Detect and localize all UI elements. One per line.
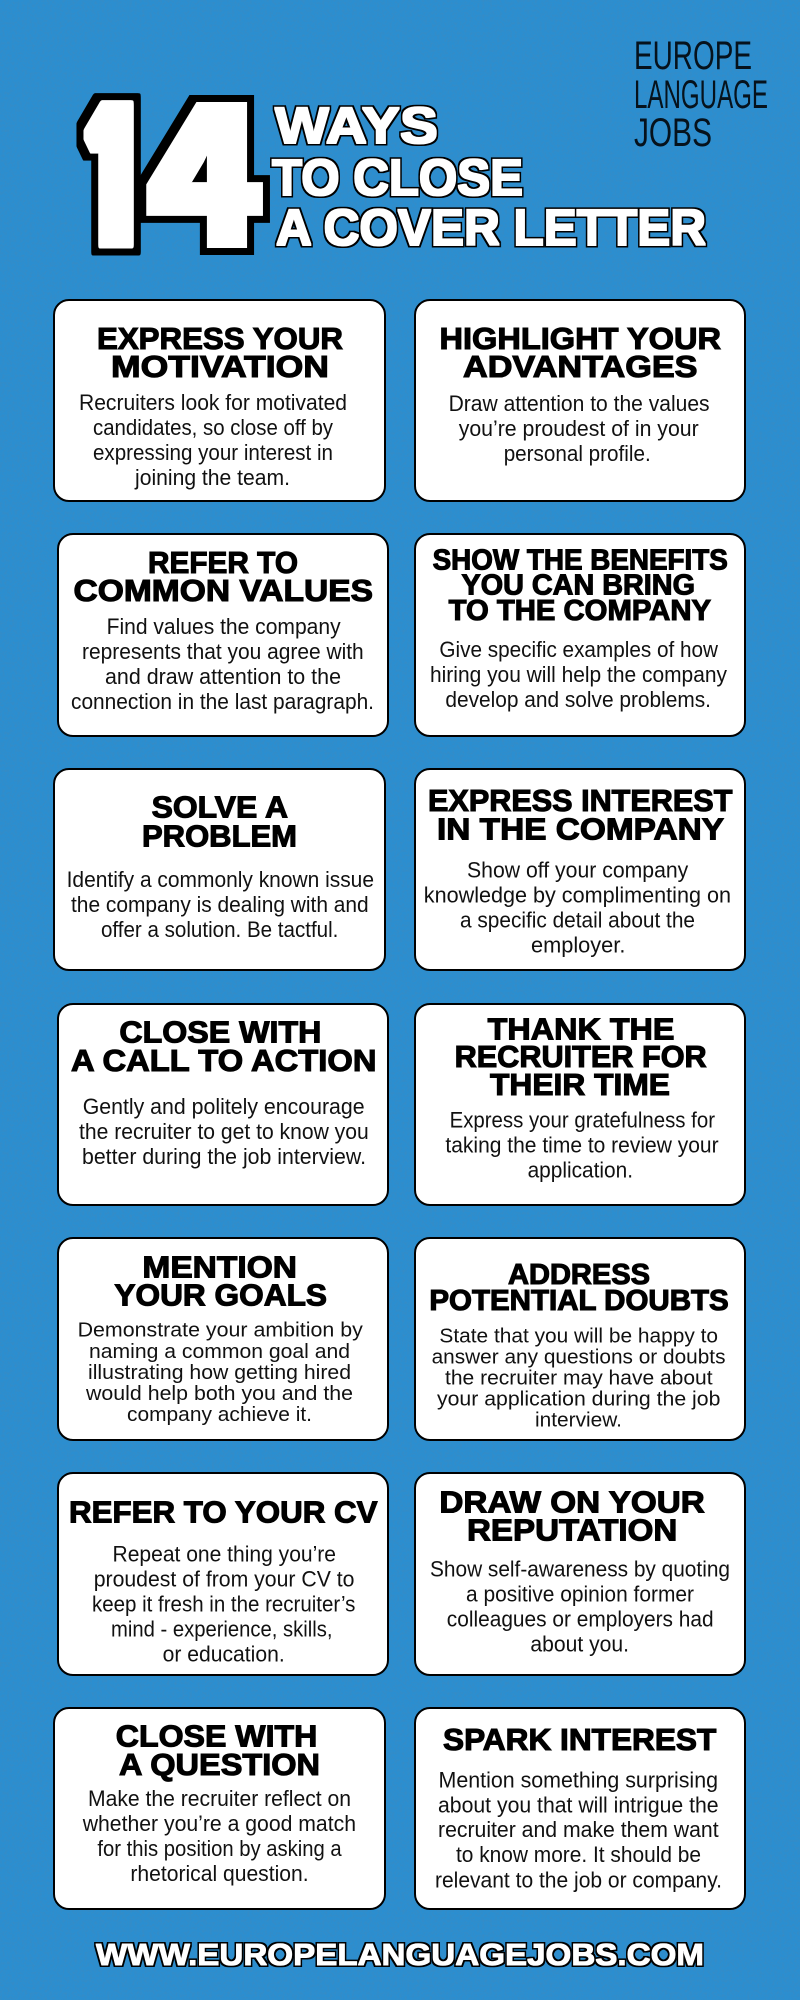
panel: mention your goals: illustrating how getting hired <box>88 1361 351 1384</box>
panel: thank the recruiter: THANK THE <box>488 1011 674 1046</box>
logo <box>634 34 768 155</box>
panel: close with a call to action <box>58 1004 388 1205</box>
panel: mention your goals: YOUR GOALS <box>114 1277 327 1312</box>
panel: mention your goals <box>58 1238 388 1440</box>
panel: close with a call to action: A CALL TO ACTION <box>71 1043 376 1078</box>
panel: spark interest: recruiter and make them want <box>438 1817 719 1842</box>
panel: show the benefits: TO THE COMPANY <box>449 595 711 627</box>
panel: address potential doubts: ADDRESS <box>508 1259 650 1291</box>
title words <box>272 97 706 256</box>
panel: thank the recruiter: Express your gratefulness for <box>450 1108 715 1133</box>
panel: refer to your cv <box>58 1473 388 1675</box>
panel: mention your goals: company achieve it. <box>127 1403 312 1426</box>
panel: show the benefits: develop and solve problems. <box>445 687 711 712</box>
panel: draw on your reputation: a positive opinion former <box>466 1582 694 1607</box>
number 14: 1 <box>84 90 144 271</box>
panel: address potential doubts: answer any questions or doubts <box>432 1346 726 1369</box>
panel: show the benefits: SHOW THE BENEFITS <box>433 544 728 576</box>
panel: express your motivation: joining the team. <box>134 465 290 490</box>
panel: highlight your advantages: you’re proudest of in your <box>459 416 699 441</box>
panel: thank the recruiter: application. <box>528 1158 633 1183</box>
panel: close with a call to action: Gently and politely encourage <box>83 1094 365 1119</box>
number 14: 4 <box>146 24 264 299</box>
panel: spark interest: relevant to the job or company. <box>435 1867 722 1892</box>
panel: highlight your advantages: ADVANTAGES <box>463 349 698 384</box>
panel: highlight your advantages: personal profile. <box>504 441 651 466</box>
panel: solve a problem: SOLVE A <box>152 790 288 825</box>
panel: close with a question: Make the recruiter reflect on <box>88 1786 351 1811</box>
panel: draw on your reputation <box>415 1473 745 1675</box>
panel: express interest in the company: Show off your company <box>467 858 689 883</box>
panel: close with a call to action: the recruiter to get to know you <box>79 1119 369 1144</box>
panel: draw on your reputation: colleagues or employers had <box>447 1607 714 1632</box>
panel: refer to common values: connection in the last paragraph. <box>71 689 374 714</box>
title <box>84 24 706 299</box>
title words: A COVER LETTER <box>276 199 706 256</box>
panel: express interest in the company: EXPRESS INTEREST <box>428 783 732 818</box>
panel: close with a question: whether you’re a good match <box>82 1811 356 1836</box>
panel: refer to common values: Find values the company <box>107 614 341 639</box>
panel: refer to common values: represents that you agree with <box>82 639 364 664</box>
panel: spark interest: Mention something surprising <box>438 1767 718 1792</box>
panel: mention your goals: MENTION <box>142 1249 297 1284</box>
panel: address potential doubts: POTENTIAL DOUBTS <box>429 1285 729 1317</box>
panel: close with a call to action: CLOSE WITH <box>119 1015 321 1050</box>
panel: solve a problem: the company is dealing with and <box>71 892 369 917</box>
number 14 <box>84 24 264 299</box>
panel: express interest in the company: knowledge by complimenting on <box>424 883 731 908</box>
logo: EUROPE <box>634 34 752 78</box>
panel: show the benefits: Give specific examples of how <box>439 637 719 662</box>
panel: solve a problem <box>54 769 385 970</box>
panel: close with a question: CLOSE WITH <box>116 1719 317 1754</box>
panel: thank the recruiter: taking the time to review your <box>445 1133 719 1158</box>
panel: express your motivation: EXPRESS YOUR <box>97 321 343 356</box>
panel: refer to your cv: Repeat one thing you’re <box>112 1542 336 1567</box>
panel: address potential doubts: interview. <box>535 1409 622 1432</box>
panel: express your motivation <box>54 300 385 501</box>
panel: draw on your reputation: DRAW ON YOUR <box>439 1485 705 1520</box>
panel: mention your goals: would help both you and the <box>85 1382 353 1405</box>
panel: refer to common values <box>58 534 388 736</box>
title words: WAYS <box>275 97 438 154</box>
footer url: WWW.EUROPELANGUAGEJOBS.COM <box>96 1937 704 1972</box>
panel: refer to your cv: REFER TO YOUR CV <box>69 1494 378 1529</box>
panel: express interest in the company: IN THE COMPANY <box>437 811 724 846</box>
panel: refer to your cv: mind - experience, skills, <box>111 1617 332 1642</box>
panel: express your motivation: MOTIVATION <box>111 349 329 384</box>
panel: refer to common values: and draw attention to the <box>105 664 341 689</box>
panel: express your motivation: Recruiters look for motivated <box>79 390 347 415</box>
panel: highlight your advantages <box>415 300 745 501</box>
panel: show the benefits <box>415 534 745 736</box>
panel: refer to your cv: proudest of from your CV to <box>94 1567 354 1592</box>
panel: refer to common values: COMMON VALUES <box>74 573 373 608</box>
panel: express interest in the company: a specific detail about the <box>460 908 695 933</box>
panel: express interest in the company <box>415 769 745 970</box>
panel: thank the recruiter: RECRUITER FOR <box>455 1039 707 1074</box>
panel: draw on your reputation: about you. <box>530 1632 629 1657</box>
panel: close with a question: for this position by asking a <box>97 1836 342 1861</box>
panel: close with a call to action: better during the job interview. <box>82 1144 366 1169</box>
panel: express your motivation: candidates, so close off by <box>93 415 334 440</box>
logo: JOBS <box>634 111 712 155</box>
panel: express interest in the company: employer. <box>531 932 625 957</box>
panel: refer to common values: REFER TO <box>148 545 298 580</box>
panel: spark interest: to know more. It should be <box>456 1842 701 1867</box>
panel: spark interest: SPARK INTEREST <box>443 1722 716 1757</box>
panel: highlight your advantages: Draw attention to the values <box>449 391 710 416</box>
panel: thank the recruiter <box>415 1004 745 1205</box>
panel: address potential doubts: State that you will be happy to <box>439 1325 718 1348</box>
panel: show the benefits: hiring you will help the company <box>430 662 728 687</box>
panel: solve a problem: PROBLEM <box>142 819 297 854</box>
panel: draw on your reputation: REPUTATION <box>467 1513 677 1548</box>
panel: solve a problem: offer a solution. Be tactful. <box>101 917 338 942</box>
panel: address potential doubts: the recruiter may have about <box>445 1367 713 1390</box>
panel: refer to your cv: or education. <box>163 1642 285 1667</box>
panel: spark interest: about you that will intrigue the <box>438 1792 719 1817</box>
panel: draw on your reputation: Show self-awareness by quoting <box>430 1557 730 1582</box>
panel: show the benefits: YOU CAN BRING <box>462 570 695 602</box>
title words: TO CLOSE <box>272 149 523 206</box>
panel: address potential doubts: your application during the job <box>437 1388 720 1411</box>
panel: mention your goals: naming a common goal and <box>89 1340 350 1363</box>
panel: close with a question: rhetorical question. <box>130 1861 309 1886</box>
panel: express your motivation: expressing your interest in <box>93 440 333 465</box>
panel: highlight your advantages: HIGHLIGHT YOUR <box>440 321 721 356</box>
panel: refer to your cv: keep it fresh in the recruiter’s <box>92 1592 355 1617</box>
panel: spark interest <box>415 1708 745 1909</box>
panel: solve a problem: Identify a commonly known issue <box>67 867 374 892</box>
panel: close with a question <box>54 1708 385 1909</box>
panel: thank the recruiter: THEIR TIME <box>490 1067 670 1102</box>
panel: close with a question: A QUESTION <box>119 1747 320 1782</box>
panel: mention your goals: Demonstrate your ambition by <box>78 1319 364 1342</box>
panel: address potential doubts <box>415 1238 745 1440</box>
